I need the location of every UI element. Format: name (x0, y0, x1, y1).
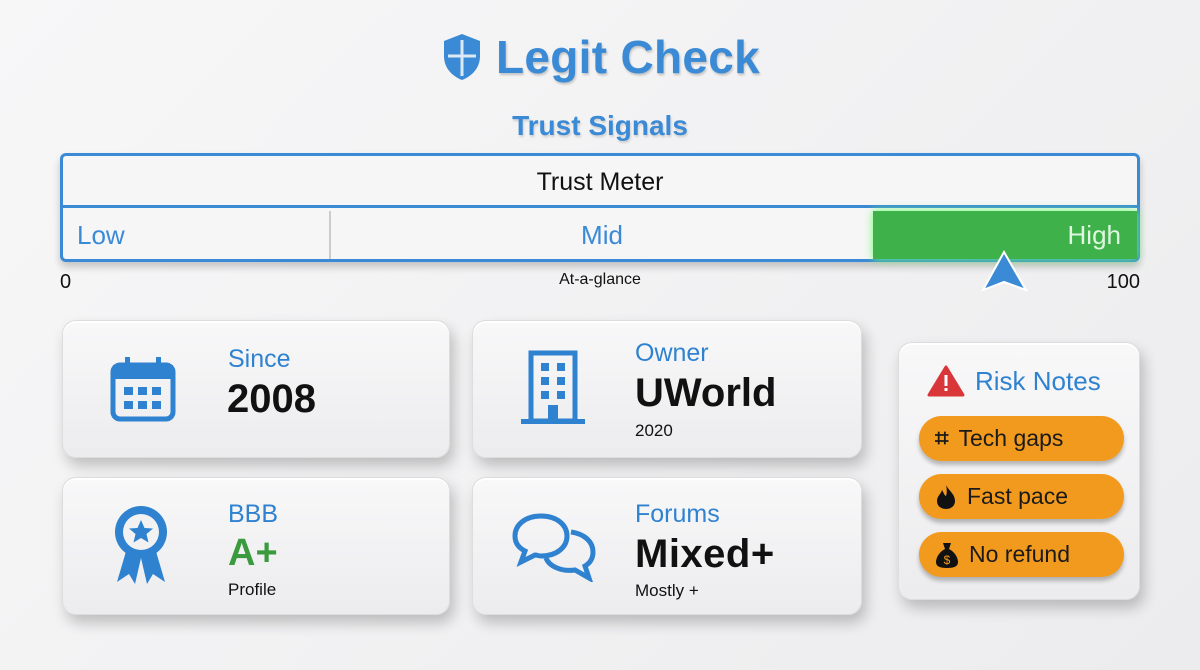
icon: award ribbon (115, 506, 167, 584)
segment: Low: Low (77, 220, 125, 250)
card: Owner: UWorld (635, 371, 776, 415)
pill: Tech gaps: ⌗ (935, 424, 949, 452)
card: BBB: A+ (228, 532, 278, 574)
meter heading: Trust Meter (537, 168, 663, 196)
card: Forums: Forums (635, 500, 720, 528)
card: BBB: BBB (228, 500, 278, 528)
card: Forums: Mostly + (635, 581, 699, 600)
pointer arrow (981, 250, 1028, 292)
segment: Mid: Mid (581, 220, 623, 250)
card: Owner: 2020 (635, 421, 673, 440)
card: Since (62, 320, 450, 458)
segment: High: High (1068, 220, 1121, 250)
risk heading: Risk Notes (975, 366, 1101, 396)
subtitle: Trust Signals: Trust Signals (512, 110, 688, 141)
icon: shield (444, 34, 480, 80)
icon: chat bubbles (512, 514, 596, 582)
icon: building (521, 350, 585, 424)
card: BBB (62, 477, 450, 615)
meter heading (63, 156, 1137, 208)
card: Owner: Owner (635, 339, 709, 367)
card: Since: Since (228, 345, 291, 373)
pill: Tech gaps: Tech gaps (959, 425, 1063, 451)
pill: No refund: No refund (969, 541, 1070, 567)
segment: High (873, 211, 1137, 259)
segment: Low (63, 211, 331, 259)
pill: Fast pace (919, 474, 1124, 519)
card: Forums: Mixed+ (635, 532, 775, 576)
pill: No refund (919, 532, 1124, 577)
scale labels: 0 (60, 271, 71, 293)
risk heading (928, 365, 1101, 396)
scale labels: 100 (1107, 271, 1140, 293)
trust meter (60, 153, 1140, 262)
pill: Fast pace: Fast pace (967, 483, 1068, 509)
icon: calendar (110, 357, 176, 422)
card: Owner (472, 320, 862, 458)
title: Legit Check (496, 31, 760, 83)
card: BBB: Profile (228, 580, 276, 599)
scale labels (60, 271, 1140, 293)
pill: No refund: $ (944, 552, 951, 566)
panel: Risk Notes (898, 342, 1140, 600)
card: Since: 2008 (227, 377, 316, 421)
card: Forums (472, 477, 862, 615)
scale labels: At-a-glance (559, 271, 641, 288)
pill: Tech gaps (919, 416, 1124, 461)
